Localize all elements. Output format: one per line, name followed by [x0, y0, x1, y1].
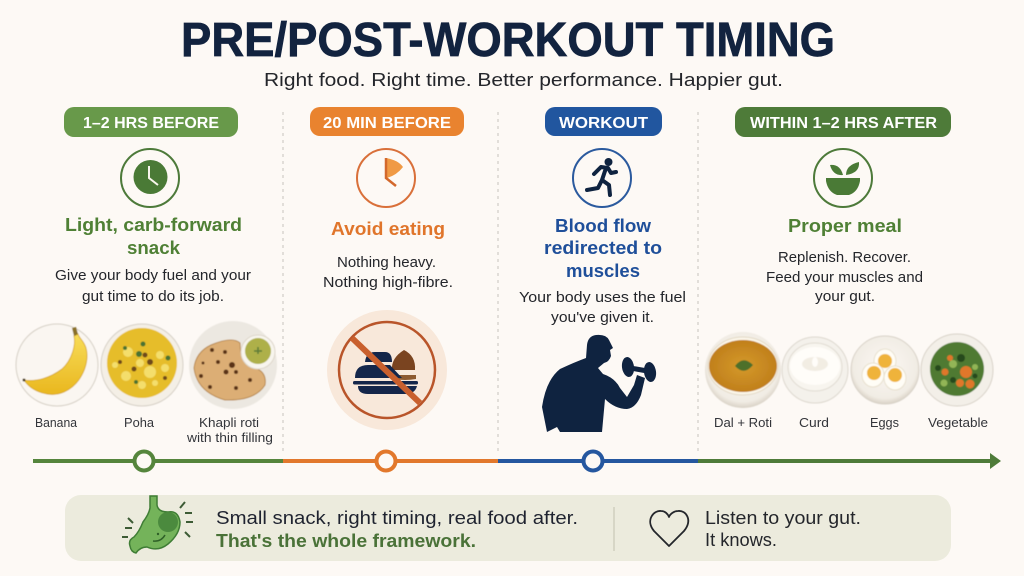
- food: vegetable: [921, 334, 993, 406]
- marker: green: [134, 452, 154, 470]
- label: khapli roti with thin filling: Khapli roti: [199, 416, 259, 430]
- title: PRE/POST-WORKOUT TIMING: [181, 14, 835, 67]
- text: whole framework: That's the whole framework.: [216, 531, 476, 551]
- text: nothing heavy: Nothing heavy.: [337, 255, 436, 271]
- callout: bottom framework banner: [65, 495, 951, 561]
- heading: light carb-forward snack: Light, carb-forward: [65, 214, 242, 235]
- icon: no heavy food: [327, 310, 447, 430]
- timeline: [33, 452, 1001, 470]
- heading: blood flow redirected to muscles: Blood flow: [555, 215, 652, 236]
- food: curd: [782, 337, 848, 403]
- panel: 20 min before: [310, 107, 464, 430]
- panel: workout: [519, 107, 686, 432]
- label: dal + roti: Dal + Roti: [714, 416, 772, 430]
- label: khapli roti with thin filling: [186, 416, 273, 445]
- marker: orange: [376, 452, 396, 470]
- pill: 20 min before: 20 MIN BEFORE: [323, 115, 451, 132]
- heading: blood flow redirected to muscles: muscles: [566, 260, 640, 281]
- text: small snack: Small snack, right timing, real food after.: [216, 508, 578, 528]
- heading: proper meal: Proper meal: [788, 215, 902, 236]
- icon: muscular man with dumbbell: [542, 335, 657, 432]
- icon: happy stomach: [122, 496, 193, 553]
- panel: 1-2 hrs before: [16, 107, 277, 445]
- text: nothing heavy: Nothing high-fibre.: [323, 275, 453, 291]
- heading: blood flow redirected to muscles: [544, 215, 662, 281]
- heading: blood flow redirected to muscles: redirected to: [544, 237, 662, 258]
- label: eggs: Eggs: [870, 416, 899, 430]
- pill: 1-2 hrs before: [64, 107, 238, 137]
- label: khapli roti with thin filling: with thin filling: [186, 431, 273, 445]
- icon: bowl with leaves: [814, 149, 872, 207]
- icon: clock: [121, 149, 179, 207]
- text: your body uses the fuel: Your body uses the fuel: [519, 290, 686, 306]
- text: give your body fuel: [55, 268, 251, 305]
- pill: 1-2 hrs before: 1–2 HRS BEFORE: [83, 115, 219, 132]
- food: poha: [101, 324, 183, 406]
- text: replenish recover: Feed your muscles and: [766, 270, 923, 286]
- food: dal: [705, 332, 781, 408]
- food: khapli roti: [189, 321, 277, 409]
- text: replenish recover: your gut.: [815, 289, 875, 305]
- text: give your body fuel: Give your body fuel and your: [55, 268, 251, 284]
- pill: within 1-2 hrs after: [735, 107, 951, 137]
- pill: workout: WORKOUT: [559, 115, 648, 132]
- label: poha: Poha: [124, 416, 154, 430]
- pill: 20 min before: [310, 107, 464, 136]
- text: replenish recover: [766, 250, 923, 305]
- icon: runner: [573, 149, 631, 207]
- text: nothing heavy: [323, 255, 453, 291]
- text: it knows: It knows.: [705, 530, 777, 550]
- subtitle: Right food. Right time. Better performance. Happier gut.: [264, 69, 783, 90]
- icon: heart: [650, 511, 688, 546]
- text: your body uses the fuel: you've given it.: [551, 310, 654, 326]
- panel: within 1-2 hrs after: [705, 107, 993, 430]
- text: your body uses the fuel: [519, 290, 686, 326]
- heading: light carb-forward snack: snack: [127, 237, 181, 258]
- food: banana: [16, 324, 98, 406]
- heading: avoid eating: Avoid eating: [331, 218, 445, 239]
- pill: workout: [545, 107, 662, 136]
- label: vegetable: Vegetable: [928, 416, 988, 430]
- text: listen to your gut: Listen to your gut.: [705, 508, 861, 528]
- label: banana: Banana: [35, 416, 77, 430]
- label: curd: Curd: [799, 416, 829, 430]
- marker: blue: [584, 452, 602, 470]
- text: give your body fuel: gut time to do its job.: [82, 289, 224, 305]
- food: eggs: [851, 336, 919, 404]
- text: replenish recover: Replenish. Recover.: [778, 250, 911, 266]
- icon: flag: [357, 149, 415, 207]
- pill: within 1-2 hrs after: WITHIN 1–2 HRS AFTER: [750, 115, 937, 132]
- heading: light carb-forward snack: [65, 214, 242, 258]
